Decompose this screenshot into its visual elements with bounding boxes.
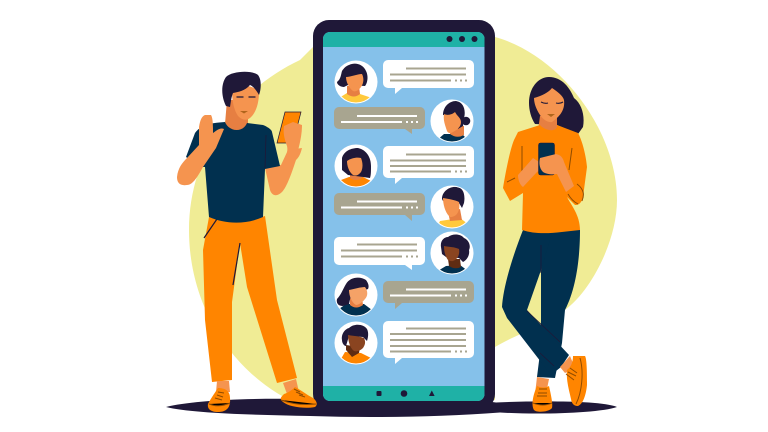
man hair bbox=[222, 72, 261, 107]
man ankles bbox=[216, 379, 299, 394]
trouser folds bbox=[204, 219, 240, 285]
bubble 1 bbox=[383, 60, 474, 94]
avatar 1 bbox=[334, 60, 378, 104]
avatar 7 bbox=[334, 322, 378, 367]
woman hair bbox=[529, 77, 584, 134]
woman ankles bbox=[535, 356, 575, 394]
man eyes and mouth bbox=[237, 96, 255, 98]
woman standing shoe bbox=[533, 386, 552, 412]
woman hand and forearm right bbox=[539, 154, 574, 192]
bubble 3 bbox=[383, 146, 474, 184]
man face bbox=[232, 86, 259, 120]
bubble 5 bbox=[334, 237, 425, 270]
illustration: people chatting beside a giant phone bbox=[166, 20, 617, 417]
ground shadow bbox=[166, 399, 617, 417]
bubble 6 bbox=[383, 281, 474, 309]
man phone bbox=[277, 112, 301, 143]
bubble 7 bbox=[383, 321, 474, 364]
avatar 5 bbox=[430, 232, 474, 277]
woman forearm left bbox=[518, 158, 545, 187]
woman phone bbox=[538, 143, 554, 175]
woman crossing leg bbox=[502, 230, 569, 375]
leg folds bbox=[527, 245, 560, 366]
man hand on phone bbox=[283, 122, 302, 163]
man right shoe bbox=[281, 387, 317, 408]
man left shoe bbox=[208, 388, 230, 412]
avatar 3 bbox=[334, 144, 378, 188]
man right arm bbox=[265, 148, 302, 195]
avatar 6 bbox=[334, 274, 378, 319]
woman neck bbox=[538, 116, 566, 135]
shirt fold bbox=[265, 135, 266, 168]
yellow background blob bbox=[189, 30, 617, 400]
woman figure bbox=[502, 77, 587, 412]
top bar bbox=[323, 32, 484, 47]
woman eyes and mouth bbox=[541, 102, 563, 103]
bubble 4 bbox=[334, 193, 425, 221]
woman standing leg bbox=[537, 230, 580, 378]
phone body bbox=[313, 20, 495, 410]
sweater folds bbox=[507, 146, 583, 204]
woman crossed shoe bbox=[566, 356, 587, 406]
phone bbox=[313, 20, 495, 410]
man figure bbox=[177, 72, 317, 412]
woman face bbox=[534, 88, 564, 122]
woman sweater bbox=[503, 125, 587, 233]
man shirt bbox=[186, 122, 280, 223]
bubble 2 bbox=[334, 107, 425, 134]
man trousers bbox=[203, 216, 297, 383]
avatar 4 bbox=[430, 186, 474, 231]
phone screen bbox=[323, 32, 484, 401]
bottom nav bar bbox=[323, 386, 484, 401]
man neck bbox=[225, 100, 248, 130]
man waving arm bbox=[177, 115, 224, 185]
avatar 2 bbox=[430, 100, 474, 145]
